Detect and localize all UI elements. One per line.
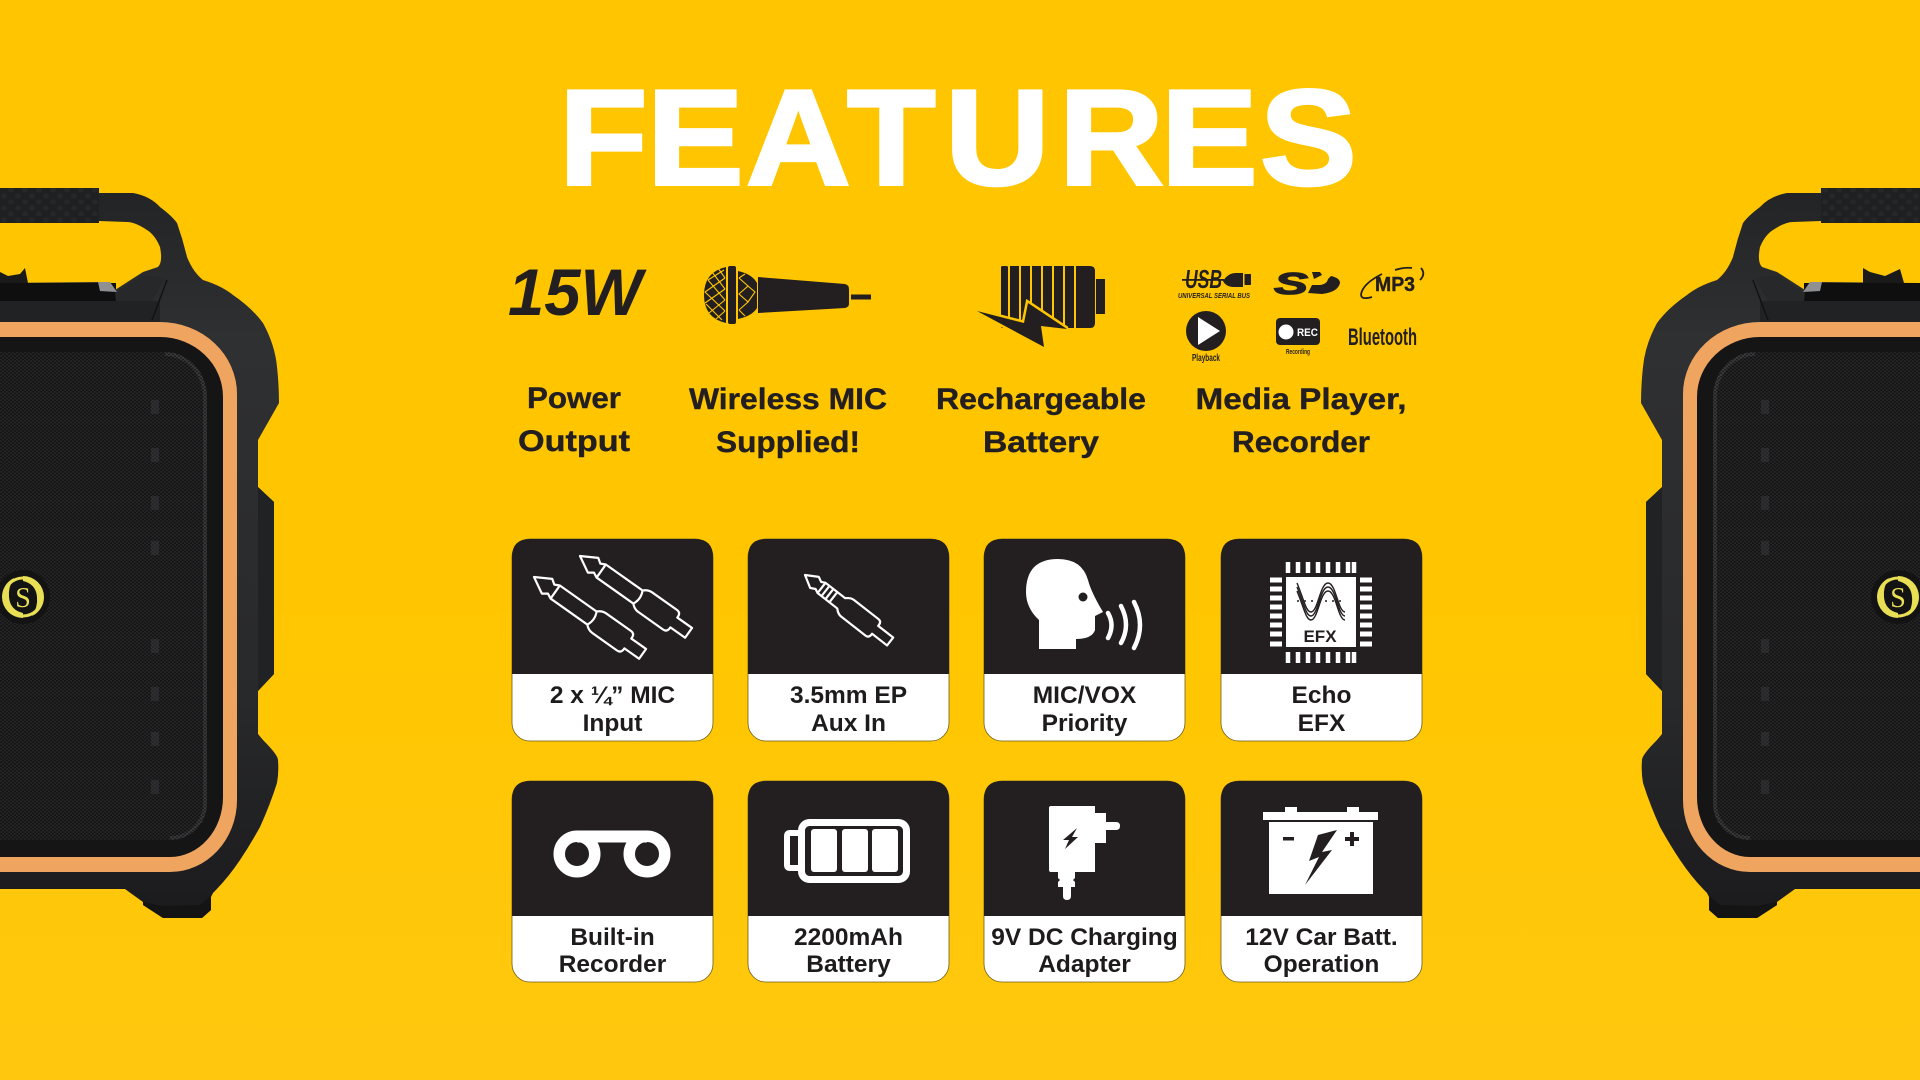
- label: media player, recorder: Recorder: [1232, 426, 1370, 459]
- card label: Battery: [806, 951, 891, 978]
- title: FEATURES: [559, 62, 1357, 214]
- card label: Built-in: [570, 924, 655, 951]
- card label: 12V Car Batt.: [1245, 924, 1398, 951]
- card: 3.5mm EP aux in: [748, 539, 949, 741]
- icon: USB: [1178, 264, 1251, 300]
- label: power output: Output: [518, 425, 630, 458]
- icon: SD: S: [1274, 266, 1309, 301]
- icon: battery full: [787, 822, 906, 880]
- label: media player, recorder: Media Player,: [1196, 383, 1406, 416]
- icon: recording: Recording: [1286, 349, 1310, 356]
- icon: car battery: [1263, 807, 1378, 894]
- icon: playback: Playback: [1192, 353, 1220, 364]
- icon: USB: UNIVERSAL SERIAL BUS: [1178, 293, 1250, 300]
- product photo: left speaker: [0, 188, 279, 918]
- card: built-in recorder: [512, 781, 713, 982]
- icon: MP3: [1361, 268, 1423, 298]
- icon: playback: [1186, 311, 1226, 364]
- icon: EFX chip: [1270, 562, 1372, 663]
- icon: Bluetooth: Bluetooth: [1348, 324, 1417, 351]
- icon: MP3: MP3: [1375, 274, 1415, 296]
- card: 9V DC charging adapter: [984, 781, 1185, 982]
- label: wireless mic: [689, 383, 887, 459]
- icon: recording: [1276, 318, 1320, 356]
- card label: [1033, 682, 1137, 737]
- logo: left speaker badge: [0, 570, 50, 624]
- card label: [550, 682, 675, 737]
- card label: [794, 924, 903, 978]
- icon: microphone: [704, 266, 871, 324]
- icon: speaking head: [1026, 559, 1140, 649]
- card: 12V car battery operation: [1221, 781, 1422, 982]
- card label: EFX: [1298, 710, 1346, 737]
- card label: Echo: [1292, 682, 1351, 709]
- icon: EFX chip: EFX: [1303, 627, 1337, 646]
- icon: 3.5mm plug: [799, 567, 897, 650]
- label: rechargeable battery: [936, 383, 1146, 459]
- label: power output: [518, 382, 630, 458]
- logo: right speaker badge: [1871, 570, 1920, 624]
- card label: 3.5mm EP: [790, 682, 907, 709]
- card label: Priority: [1042, 710, 1128, 737]
- label: power output: Power: [527, 382, 621, 415]
- label: rechargeable battery: Rechargeable: [936, 383, 1146, 416]
- label: wireless mic: Supplied!: [716, 426, 860, 459]
- card label: 9V DC Charging: [991, 924, 1178, 951]
- logo: right speaker badge: S: [1890, 583, 1906, 614]
- card: MIC/VOX priority: [984, 539, 1185, 741]
- feature: media player, recorder: [1178, 264, 1423, 459]
- icon: battery with lightning bolt: [977, 266, 1105, 347]
- volume knobs: right speaker: [1863, 268, 1904, 283]
- icon: SD: [1274, 266, 1340, 301]
- card label: 2 x ¼” MIC: [550, 682, 675, 709]
- card label: [1292, 682, 1351, 737]
- card: 2 x 1/4 inch mic input: [512, 539, 713, 741]
- card label: Operation: [1264, 951, 1379, 978]
- icon: USB: USB: [1185, 264, 1222, 294]
- icon: wall adapter: [1049, 806, 1120, 900]
- card label: MIC/VOX: [1033, 682, 1137, 709]
- icon: tape reels: [559, 836, 665, 872]
- feature: rechargeable battery: [936, 266, 1146, 459]
- icon: recording: REC: [1297, 327, 1318, 339]
- card label: Recorder: [559, 951, 667, 978]
- card label: Adapter: [1038, 951, 1131, 978]
- feature: wireless mic: [689, 266, 887, 459]
- card label: [991, 924, 1178, 978]
- card: 2200mAh battery: [748, 781, 949, 982]
- card label: 2200mAh: [794, 924, 903, 951]
- label: rechargeable battery: Battery: [983, 426, 1099, 459]
- card label: [1245, 924, 1398, 978]
- label: wireless mic: Wireless MIC: [689, 383, 887, 416]
- card label: [559, 924, 667, 978]
- icon: two jack plugs: [527, 546, 695, 664]
- icon: 15W: 15W: [508, 255, 647, 329]
- feature: power output: [508, 255, 647, 458]
- product photo: right speaker: [1641, 188, 1920, 918]
- label: media player, recorder: [1196, 383, 1406, 459]
- card label: Input: [583, 710, 642, 737]
- card label: [790, 682, 907, 737]
- card: echo EFX: [1221, 539, 1422, 741]
- logo: left speaker badge: S: [15, 583, 31, 614]
- volume knob: left speaker: [0, 268, 28, 283]
- card label: Aux In: [811, 710, 886, 737]
